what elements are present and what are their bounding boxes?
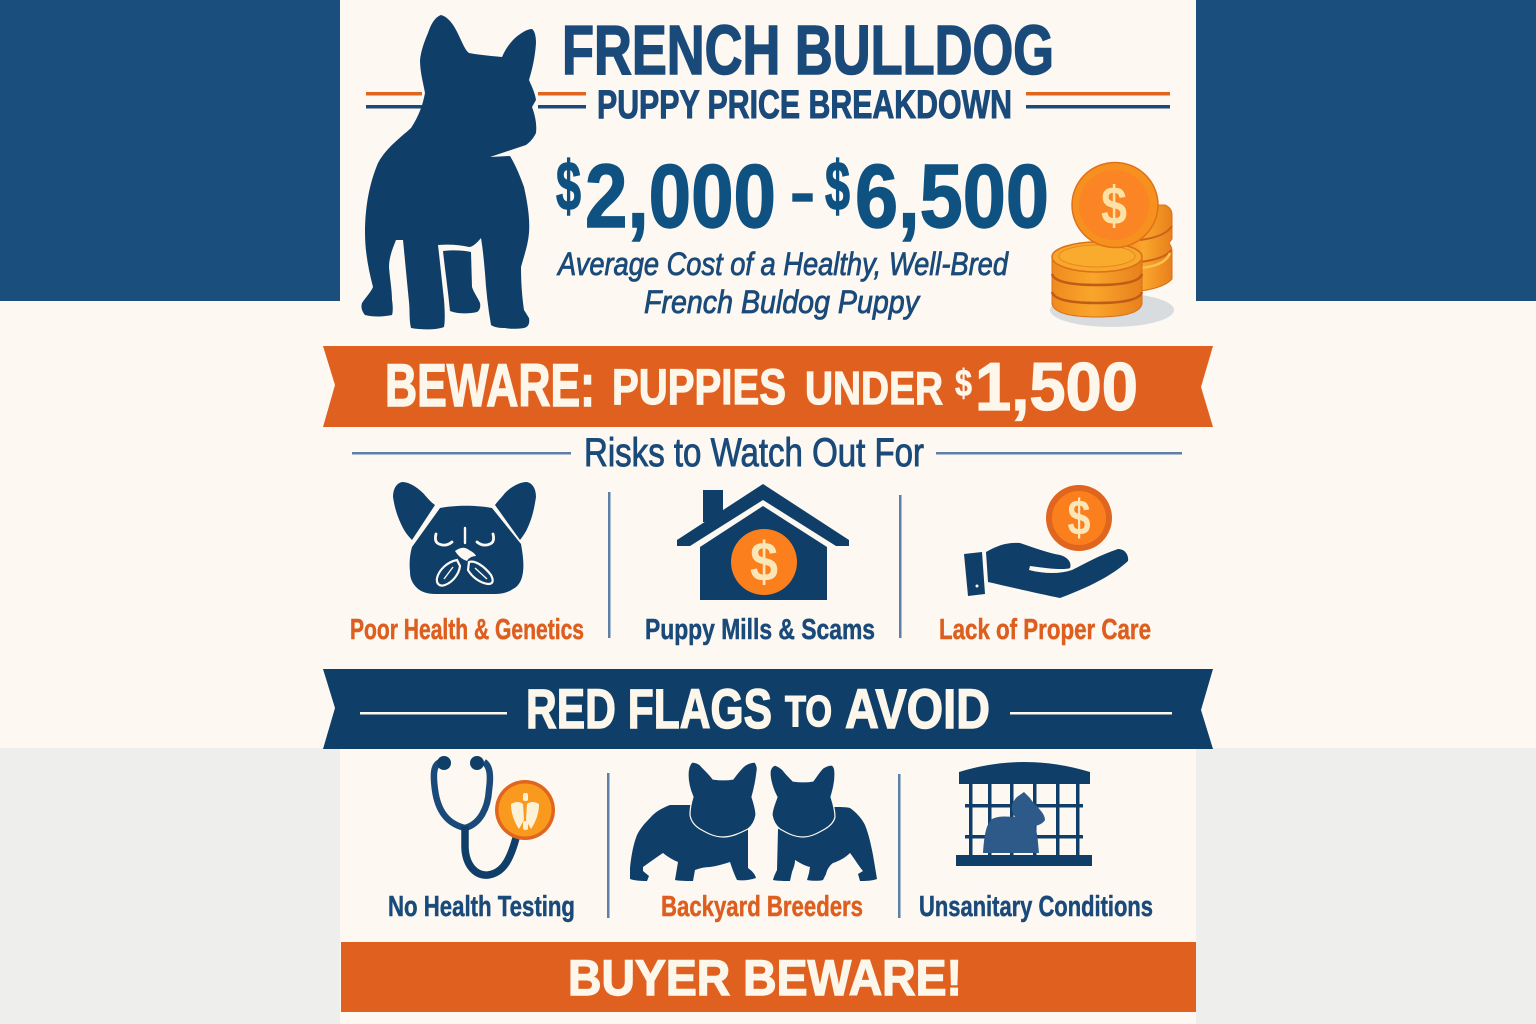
risk label: Poor Health & Genetics — [350, 614, 584, 646]
icon: french bulldog silhouette — [361, 15, 536, 329]
header rule lines — [366, 92, 1170, 108]
icon: house with dollar: $ — [750, 530, 778, 593]
panel: red flags — [388, 756, 1153, 923]
footer bar — [341, 942, 1196, 1012]
risk label: Unsanitary Conditions — [919, 891, 1153, 923]
panel: header — [361, 11, 1174, 329]
banner text: TO — [785, 687, 832, 736]
panel: red flags banner — [323, 669, 1213, 749]
icon: two dogs — [630, 762, 877, 881]
panel: footer banner — [341, 942, 1196, 1012]
icon: stethoscope — [434, 756, 555, 875]
panel: beware banner — [323, 346, 1213, 427]
risk label: Puppy Mills & Scams — [645, 614, 875, 646]
icon: cage with dog — [956, 762, 1092, 866]
risks heading: Risks to Watch Out For — [584, 431, 924, 475]
price range: $ — [825, 147, 850, 225]
banner text — [526, 677, 990, 740]
icon: coin stack: $ — [1101, 176, 1127, 236]
banner text: UNDER — [805, 362, 943, 414]
footer text: BUYER BEWARE! — [568, 950, 962, 1006]
banner text: PUPPIES — [612, 359, 786, 415]
banner text: 1,500 — [975, 349, 1138, 425]
banner text: RED FLAGS — [526, 677, 772, 740]
icon: hand with coin: $ — [1068, 490, 1091, 546]
banner text — [385, 349, 1138, 425]
banner text: BEWARE: — [385, 352, 595, 419]
banner ribbon — [323, 346, 1213, 427]
banner ribbon — [323, 669, 1213, 749]
banner text: AVOID — [845, 677, 990, 740]
panel: risks — [350, 431, 1182, 646]
title: FRENCH BULLDOG — [562, 11, 1054, 89]
icon: hand with coin — [964, 485, 1128, 598]
risk label: Backyard Breeders — [661, 891, 863, 923]
banner text: $ — [955, 363, 972, 405]
subtitle: PUPPY PRICE BREAKDOWN — [597, 83, 1012, 127]
price range: 6,500 — [855, 147, 1049, 247]
risk label: Lack of Proper Care — [939, 614, 1151, 646]
risk label: No Health Testing — [388, 891, 575, 923]
price caption — [556, 246, 1009, 320]
price range — [556, 147, 1049, 247]
icon: house with dollar — [677, 484, 849, 600]
price caption: French Buldog Puppy — [644, 284, 921, 320]
icon: sad dog face — [393, 482, 536, 594]
price range: 2,000 — [585, 147, 776, 247]
price caption: Average Cost of a Healthy, Well-Bred — [556, 246, 1009, 282]
price range: $ — [556, 147, 581, 225]
icon: coin stack — [1050, 162, 1174, 327]
